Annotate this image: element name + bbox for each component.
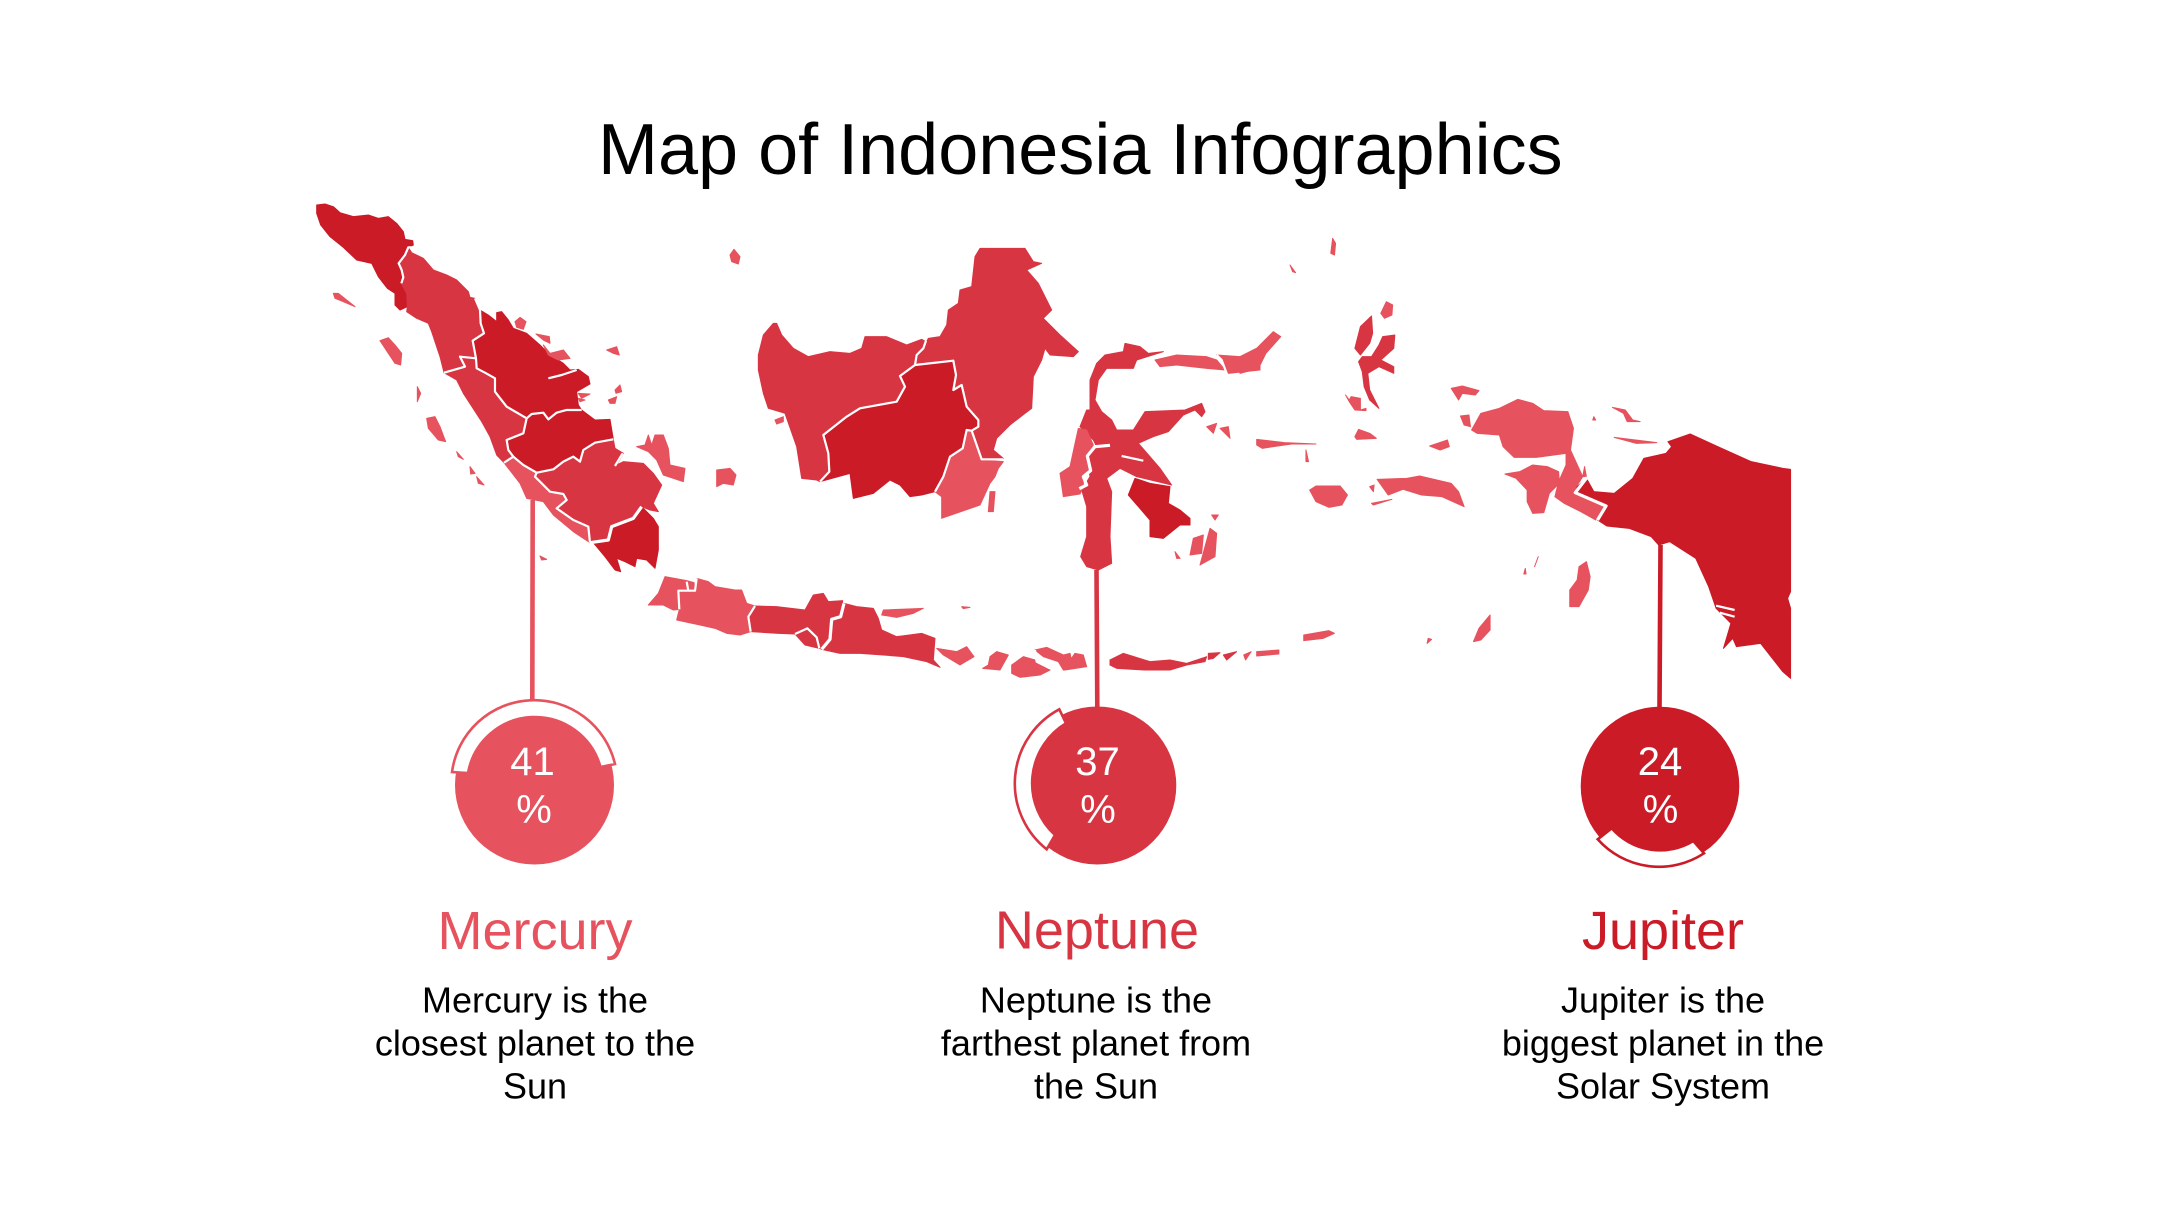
percentage value: 24	[1638, 740, 1682, 784]
percentage value: 37	[1075, 740, 1120, 784]
map of Indonesia	[317, 204, 1791, 678]
heading: Jupiter	[1582, 901, 1744, 961]
progress ring arc	[452, 700, 615, 773]
map region: Sumatra	[317, 204, 740, 572]
description: Jupiter is the	[1561, 980, 1765, 1020]
percentage circle 24%	[1581, 707, 1739, 865]
percentage value: %	[516, 788, 552, 832]
map region: Kalimantan	[758, 248, 1078, 518]
connector line	[530, 500, 535, 702]
callout: Mercury	[375, 500, 695, 1106]
percentage value: %	[1643, 788, 1678, 832]
description: Sun	[503, 1066, 567, 1106]
description: biggest planet in the	[1502, 1022, 1824, 1064]
heading: Neptune	[995, 900, 1199, 960]
percentage circle 37%	[1018, 706, 1176, 864]
heading: Mercury	[437, 901, 633, 961]
callout: Jupiter	[1502, 545, 1824, 1106]
percentage circle 41%	[455, 706, 614, 864]
map region: Maluku and Papua	[1240, 238, 1791, 678]
percentage value: %	[1080, 788, 1116, 832]
map region: Java and Bali	[648, 577, 1087, 677]
title: Map of Indonesia Infographics	[598, 110, 1563, 190]
description: Neptune is the	[980, 980, 1212, 1020]
progress ring arc	[1598, 828, 1704, 867]
description: Mercury is the	[422, 980, 648, 1020]
percentage value: 41	[510, 740, 555, 784]
callout: Neptune	[941, 570, 1251, 1106]
description: Solar System	[1556, 1066, 1770, 1106]
progress ring arc	[1015, 709, 1066, 849]
connector line	[1660, 545, 1661, 708]
description: the Sun	[1034, 1066, 1158, 1106]
connector line	[1094, 570, 1100, 708]
description: closest planet to the	[375, 1022, 695, 1064]
map region: Sulawesi and Flores	[1060, 343, 1260, 670]
description: farthest planet from	[941, 1022, 1251, 1064]
